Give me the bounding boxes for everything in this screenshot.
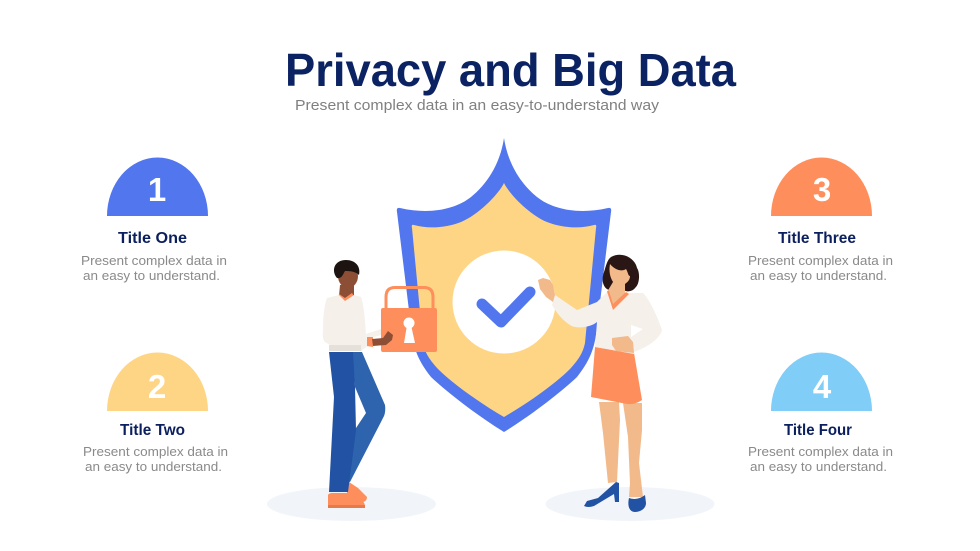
text block one <box>81 254 227 283</box>
panel: item one <box>81 158 227 283</box>
heading: title three: Title Three <box>778 230 856 247</box>
number four: 4 <box>813 368 832 405</box>
text block one: an easy to understand. <box>83 269 220 283</box>
ground shadows <box>267 487 714 521</box>
semicircle badge one <box>107 158 208 216</box>
text block two: Present complex data in <box>83 445 228 459</box>
heading: title four: Title Four <box>784 422 852 439</box>
text block three: an easy to understand. <box>750 269 887 283</box>
man's hand <box>372 331 393 346</box>
text block one: Present complex data in <box>81 254 227 268</box>
text block two: an easy to understand. <box>85 460 222 474</box>
semicircle badge four <box>771 353 872 411</box>
title: Privacy and Big Data <box>285 44 736 96</box>
text block three <box>748 254 893 283</box>
text block four: Present complex data in <box>748 445 893 459</box>
figure: woman <box>538 255 662 512</box>
text block four <box>748 445 893 474</box>
semicircle badge three <box>771 158 872 216</box>
text block two <box>83 445 228 474</box>
icon: padlock <box>372 288 437 352</box>
panel: item three <box>748 158 893 283</box>
heading: title one: Title One <box>118 230 187 247</box>
number one: 1 <box>148 171 166 208</box>
text block three: Present complex data in <box>748 254 893 268</box>
panel: item two <box>83 353 228 474</box>
semicircle badge two <box>107 353 208 411</box>
number three: 3 <box>813 171 831 208</box>
heading: title two: Title Two <box>120 422 185 439</box>
number two: 2 <box>148 368 166 405</box>
text block four: an easy to understand. <box>750 460 887 474</box>
figure: man <box>323 260 385 508</box>
subtitle: Present complex data in an easy-to-understand way <box>295 97 660 114</box>
icon: shield <box>397 138 611 432</box>
panel: item four <box>748 353 893 474</box>
